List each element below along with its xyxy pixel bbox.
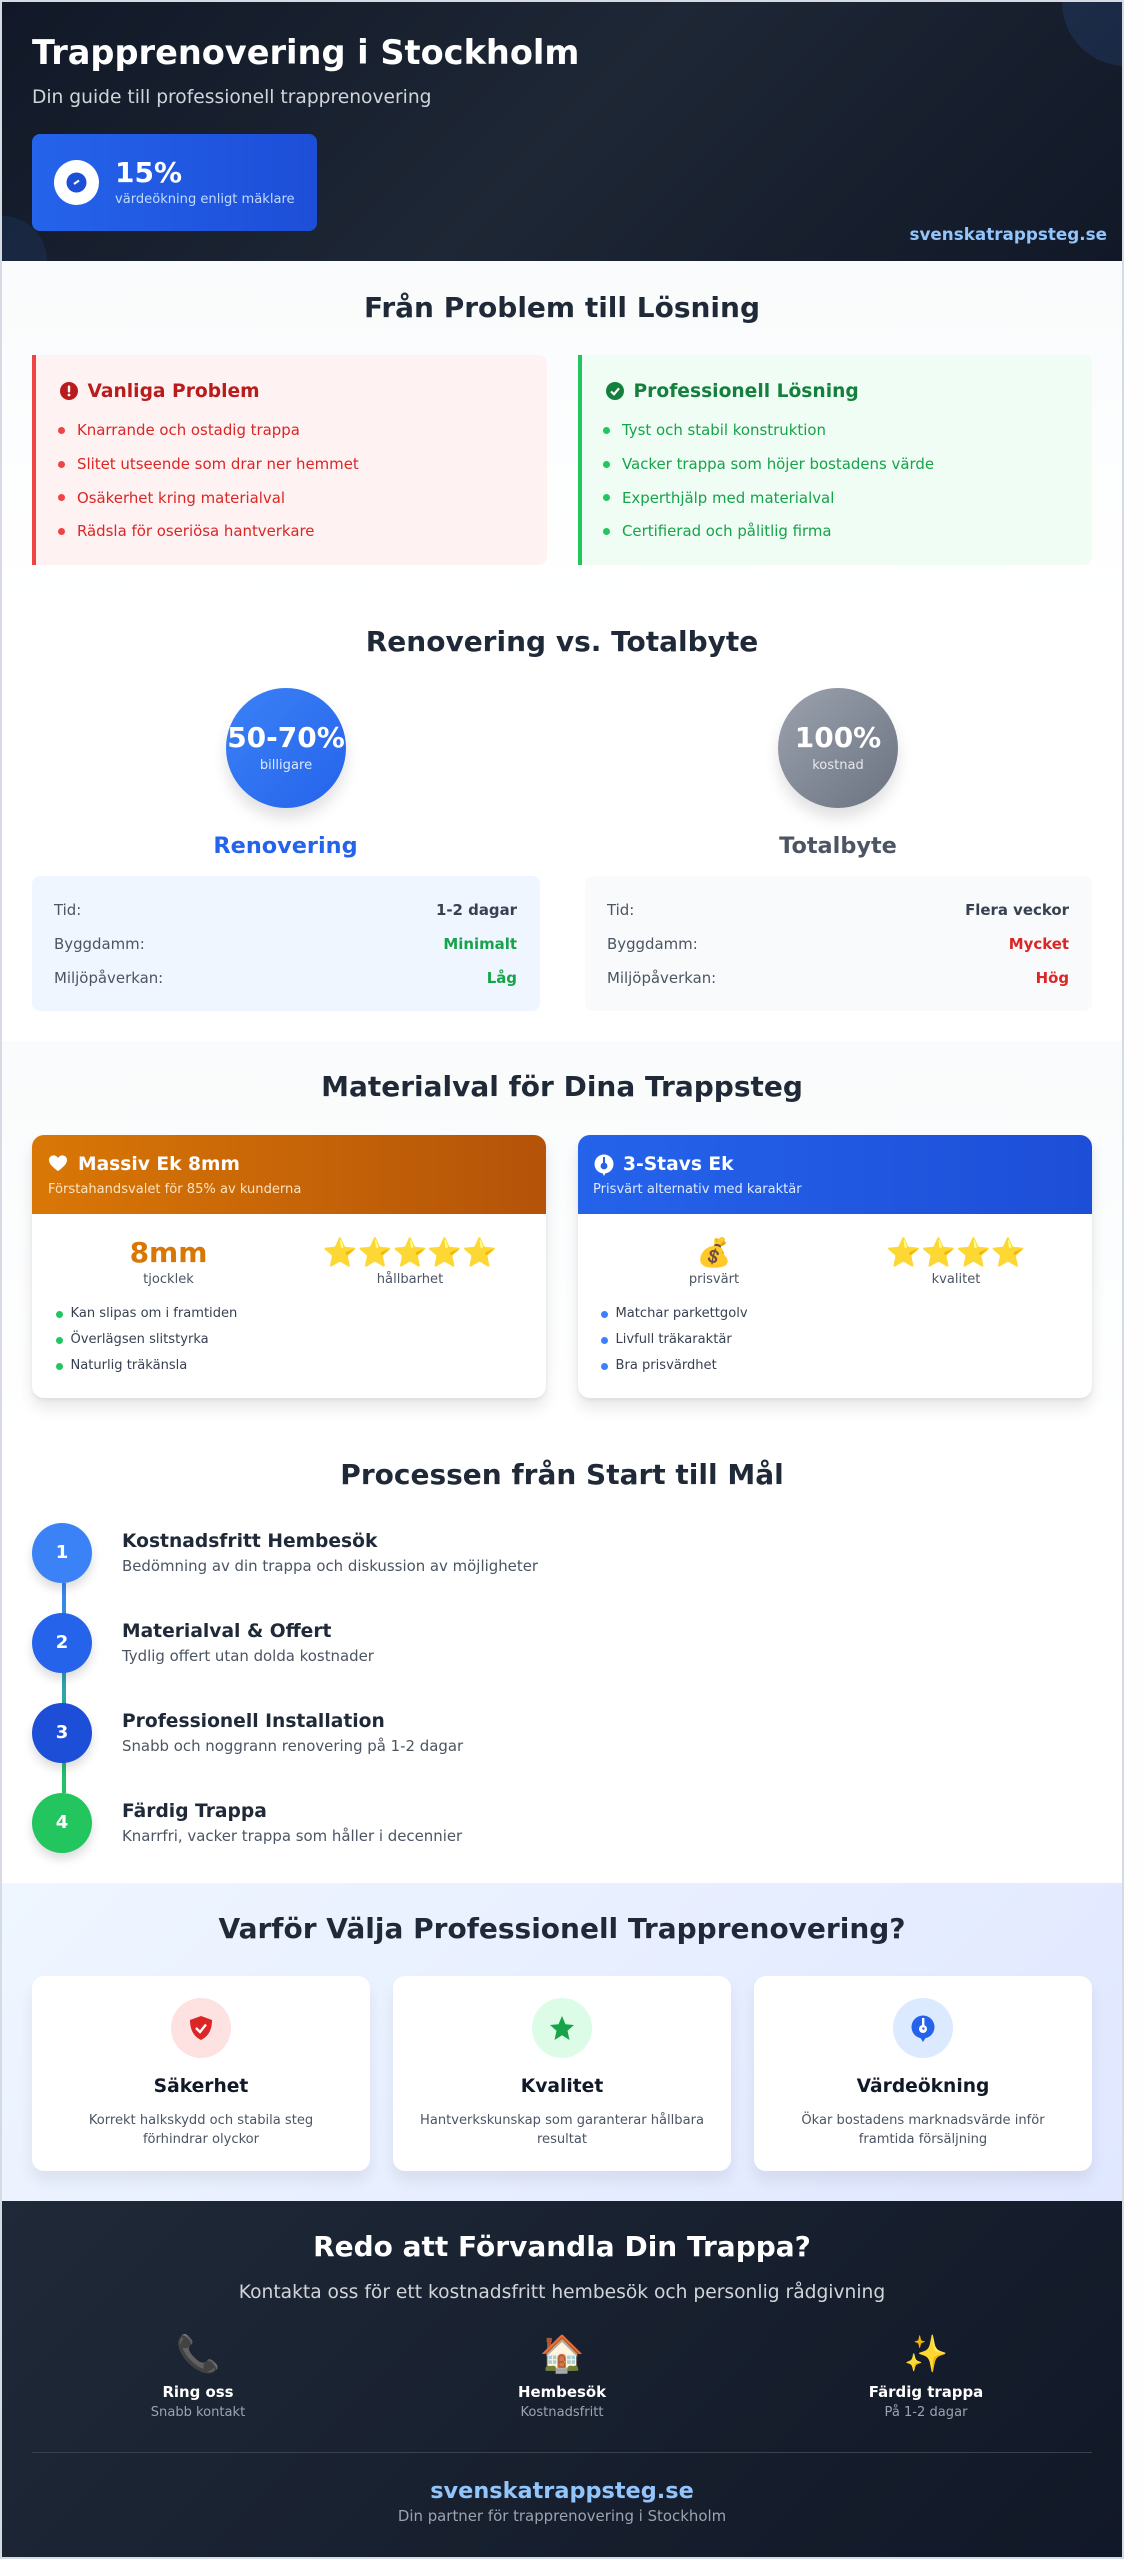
heading: Materialval för Dina Trappsteg [321, 1070, 803, 1103]
feature list [601, 1306, 748, 1373]
panel: replacement facts: Miljöpåverkan: [607, 969, 716, 987]
section: why professional [0, 1883, 1124, 2201]
panel: replacement facts: Hög [1036, 969, 1069, 987]
feature list: Livfull träkaraktär [616, 1332, 732, 1347]
card: quality: Kvalitet [521, 2076, 603, 2097]
heading: Redo att Förvandla Din Trappa? [313, 2230, 811, 2263]
badge value: 15% [115, 156, 182, 189]
icon: shield [171, 1998, 231, 2058]
panel: replacement facts [585, 876, 1092, 1011]
stat: quality stars: kvalitet [932, 1272, 980, 1287]
step 1: Kostnadsfritt Hembesök [122, 1531, 377, 1552]
label: Renovering: Renovering [213, 833, 358, 859]
header banner [0, 0, 1124, 261]
problem list: Knarrande och ostadig trappa [77, 421, 300, 439]
panel: renovation facts: Minimalt [443, 935, 517, 953]
card: three-strip oak [578, 1135, 1092, 1398]
panel: renovation facts: Byggdamm: [54, 935, 145, 953]
panel heading: Vanliga Problem [88, 381, 260, 402]
card header: 3-Stavs Ek [623, 1154, 734, 1175]
stat: durability stars: ⭐⭐⭐⭐⭐ [323, 1236, 497, 1269]
feature list: Överlägsen slitstyrka [70, 1332, 209, 1347]
panel: replacement facts: Mycket [1009, 935, 1069, 953]
card: value increase [754, 1976, 1092, 2171]
contact: home visit [518, 2333, 606, 2420]
card: safety [32, 1976, 370, 2171]
card: quality: resultat [537, 2132, 587, 2147]
card: value increase: framtida försäljning [859, 2132, 987, 2147]
icon: check [606, 382, 624, 400]
timeline connector [62, 1583, 66, 1793]
title: Trapprenovering i Stockholm [32, 33, 579, 72]
panel: renovation facts: Miljöpåverkan: [54, 969, 163, 987]
stat: quality stars: ⭐⭐⭐⭐ [886, 1236, 1026, 1269]
step 1: Bedömning av din trappa och diskussion av möjligheter [122, 1557, 538, 1575]
card: safety: Korrekt halkskydd och stabila steg [89, 2113, 313, 2128]
card: value increase: Värdeökning [857, 2076, 989, 2097]
label: Totalbyte: Totalbyte [779, 833, 897, 859]
contact: call: Snabb kontakt [151, 2405, 245, 2420]
contact: home visit: 🏠 [540, 2333, 584, 2375]
step 3: 3 [56, 1722, 68, 1743]
step 4: 4 [56, 1812, 68, 1833]
step 2: Materialval & Offert [122, 1621, 331, 1642]
icon: star [532, 1998, 592, 2058]
panel: renovation facts: 1-2 dagar [436, 901, 517, 919]
feature list: Matchar parkettgolv [616, 1306, 748, 1321]
contact: call [151, 2333, 245, 2420]
feature list: Bra prisvärdhet [616, 1358, 717, 1373]
problem list: Slitet utseende som drar ner hemmet [77, 455, 359, 473]
contact: finished stair: På 1-2 dagar [885, 2405, 967, 2420]
tagline: Din partner för trapprenovering i Stockholm [398, 2507, 726, 2525]
step 3 [29, 1703, 464, 1772]
panel: replacement facts: Flera veckor [965, 901, 1069, 919]
contact: home visit: Kostnadsfritt [520, 2405, 604, 2420]
circle: 100% cost [778, 688, 898, 808]
website: svenskatrappsteg.se [430, 2478, 694, 2504]
subheading: Kontakta oss för ett kostnadsfritt hembesök och personlig rådgivning [239, 2282, 885, 2303]
card: quality: Hantverkskunskap som garanterar hållbara [420, 2113, 704, 2128]
stat: durability stars: hållbarhet [377, 1272, 443, 1287]
circle: 100% cost: kostnad [812, 758, 864, 773]
feature list: Naturlig träkänsla [70, 1358, 187, 1373]
step 3: Snabb och noggrann renovering på 1-2 dagar [122, 1737, 463, 1755]
section: renovation vs replacement [0, 600, 1124, 1041]
icon: gauge [54, 160, 99, 205]
circle: 100% cost: 100% [795, 721, 881, 754]
panel: renovation facts [32, 876, 540, 1011]
panel: replacement facts: Tid: [607, 901, 634, 919]
stat: affordable: prisvärt [689, 1272, 739, 1287]
icon: exclamation [60, 382, 78, 400]
heading: Från Problem till Lösning [364, 291, 760, 324]
solution list: Tyst och stabil konstruktion [622, 421, 826, 439]
panel: common problems [32, 355, 547, 565]
card: safety: Säkerhet [154, 2076, 248, 2097]
subtitle: Din guide till professionell trapprenovering [32, 87, 432, 108]
card: quality [393, 1976, 731, 2171]
icon: heart [49, 1155, 67, 1172]
card: safety: förhindrar olyckor [143, 2132, 259, 2147]
stat: thickness: 8mm [130, 1236, 207, 1269]
step 2: 2 [56, 1632, 68, 1653]
solution list [603, 421, 934, 540]
card header [32, 1135, 546, 1214]
section: problem to solution [0, 261, 1124, 600]
step 1 [29, 1523, 538, 1592]
icon: droplet key [893, 1998, 953, 2058]
problem list: Rädsla för oseriösa hantverkare [77, 522, 314, 540]
circle: 50-70% cheaper [226, 688, 346, 808]
solution list: Vacker trappa som höjer bostadens värde [622, 455, 934, 473]
step 2 [29, 1613, 374, 1682]
problem list: Osäkerhet kring materialval [77, 488, 285, 506]
step 1: 1 [56, 1542, 68, 1563]
heading: Varför Välja Professionell Trapprenovering? [218, 1912, 906, 1945]
step 4: Färdig Trappa [122, 1801, 267, 1822]
panel: renovation facts: Låg [487, 969, 517, 987]
step 4 [29, 1793, 462, 1862]
card: value increase: Ökar bostadens marknadsvärde inför [801, 2113, 1045, 2128]
card header: Förstahandsvalet för 85% av kunderna [48, 1182, 301, 1197]
contact: finished stair: ✨ [904, 2333, 948, 2375]
circle: 50-70% cheaper: billigare [260, 758, 312, 773]
stat: thickness [130, 1236, 207, 1287]
solution list: Experthjälp med materialval [622, 488, 834, 506]
problem list [58, 421, 359, 540]
panel: renovation facts: Tid: [54, 901, 81, 919]
contact: finished stair: Färdig trappa [869, 2383, 983, 2401]
contact: finished stair [869, 2333, 983, 2420]
feature list: Kan slipas om i framtiden [70, 1306, 237, 1321]
card: massive oak [32, 1135, 546, 1398]
solution list: Certifierad och pålitlig firma [622, 522, 832, 540]
footer call to action [0, 2201, 1124, 2559]
stat: affordable [689, 1236, 739, 1287]
step 4: Knarrfri, vacker trappa som håller i decennier [122, 1827, 462, 1845]
card header [578, 1135, 1092, 1214]
value badge: 15% [32, 134, 317, 231]
stat: affordable: 💰 [697, 1236, 731, 1269]
panel: professional solution [578, 355, 1092, 565]
contact: call: Ring oss [162, 2383, 234, 2401]
icon: droplet key [594, 1154, 614, 1176]
stat: quality stars [886, 1236, 1026, 1287]
card header: Massiv Ek 8mm [78, 1154, 240, 1175]
feature list [56, 1306, 237, 1373]
stat: thickness: tjocklek [143, 1272, 194, 1287]
heading: Processen från Start till Mål [340, 1458, 784, 1491]
panel: replacement facts: Byggdamm: [607, 935, 698, 953]
section: materials [0, 1041, 1124, 1440]
stat: durability stars [323, 1236, 497, 1287]
contact: home visit: Hembesök [518, 2383, 606, 2401]
card header: Prisvärt alternativ med karaktär [593, 1182, 802, 1197]
badge caption: värdeökning enligt mäklare [115, 192, 295, 207]
website label: svenskatrappsteg.se [909, 224, 1107, 244]
step 2: Tydlig offert utan dolda kostnader [122, 1647, 374, 1665]
heading: Renovering vs. Totalbyte [366, 625, 758, 658]
circle: 50-70% cheaper: 50-70% [227, 721, 345, 754]
step 3: Professionell Installation [122, 1711, 385, 1732]
contact: call: 📞 [176, 2333, 220, 2375]
panel heading: Professionell Lösning [634, 381, 859, 402]
section: process [0, 1440, 1124, 1883]
